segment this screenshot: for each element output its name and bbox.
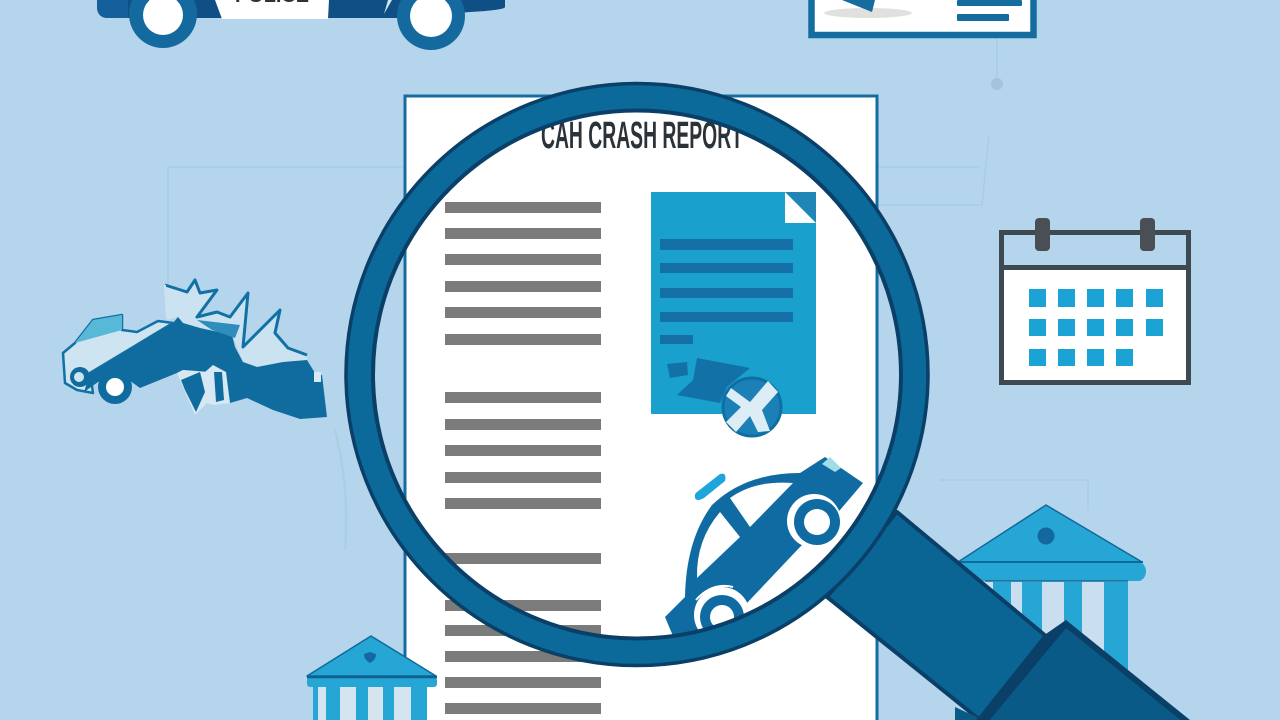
car in report xyxy=(665,457,863,643)
icon: large courthouse xyxy=(958,505,1146,720)
report page xyxy=(405,96,877,720)
magnifying glass xyxy=(346,84,1190,720)
crushed wheel xyxy=(177,365,230,415)
icon: small courthouse xyxy=(307,636,437,720)
icon: police car xyxy=(97,0,505,50)
text lines xyxy=(445,202,601,714)
handle xyxy=(827,512,1047,720)
icon: calendar xyxy=(1001,218,1189,382)
blue document xyxy=(651,192,816,436)
sleeve xyxy=(955,707,983,720)
report title: CAH CRASH REPORT xyxy=(541,115,743,157)
lens ring xyxy=(360,97,914,652)
icon: document card xyxy=(812,0,1034,35)
icon: crashed car xyxy=(63,280,327,419)
